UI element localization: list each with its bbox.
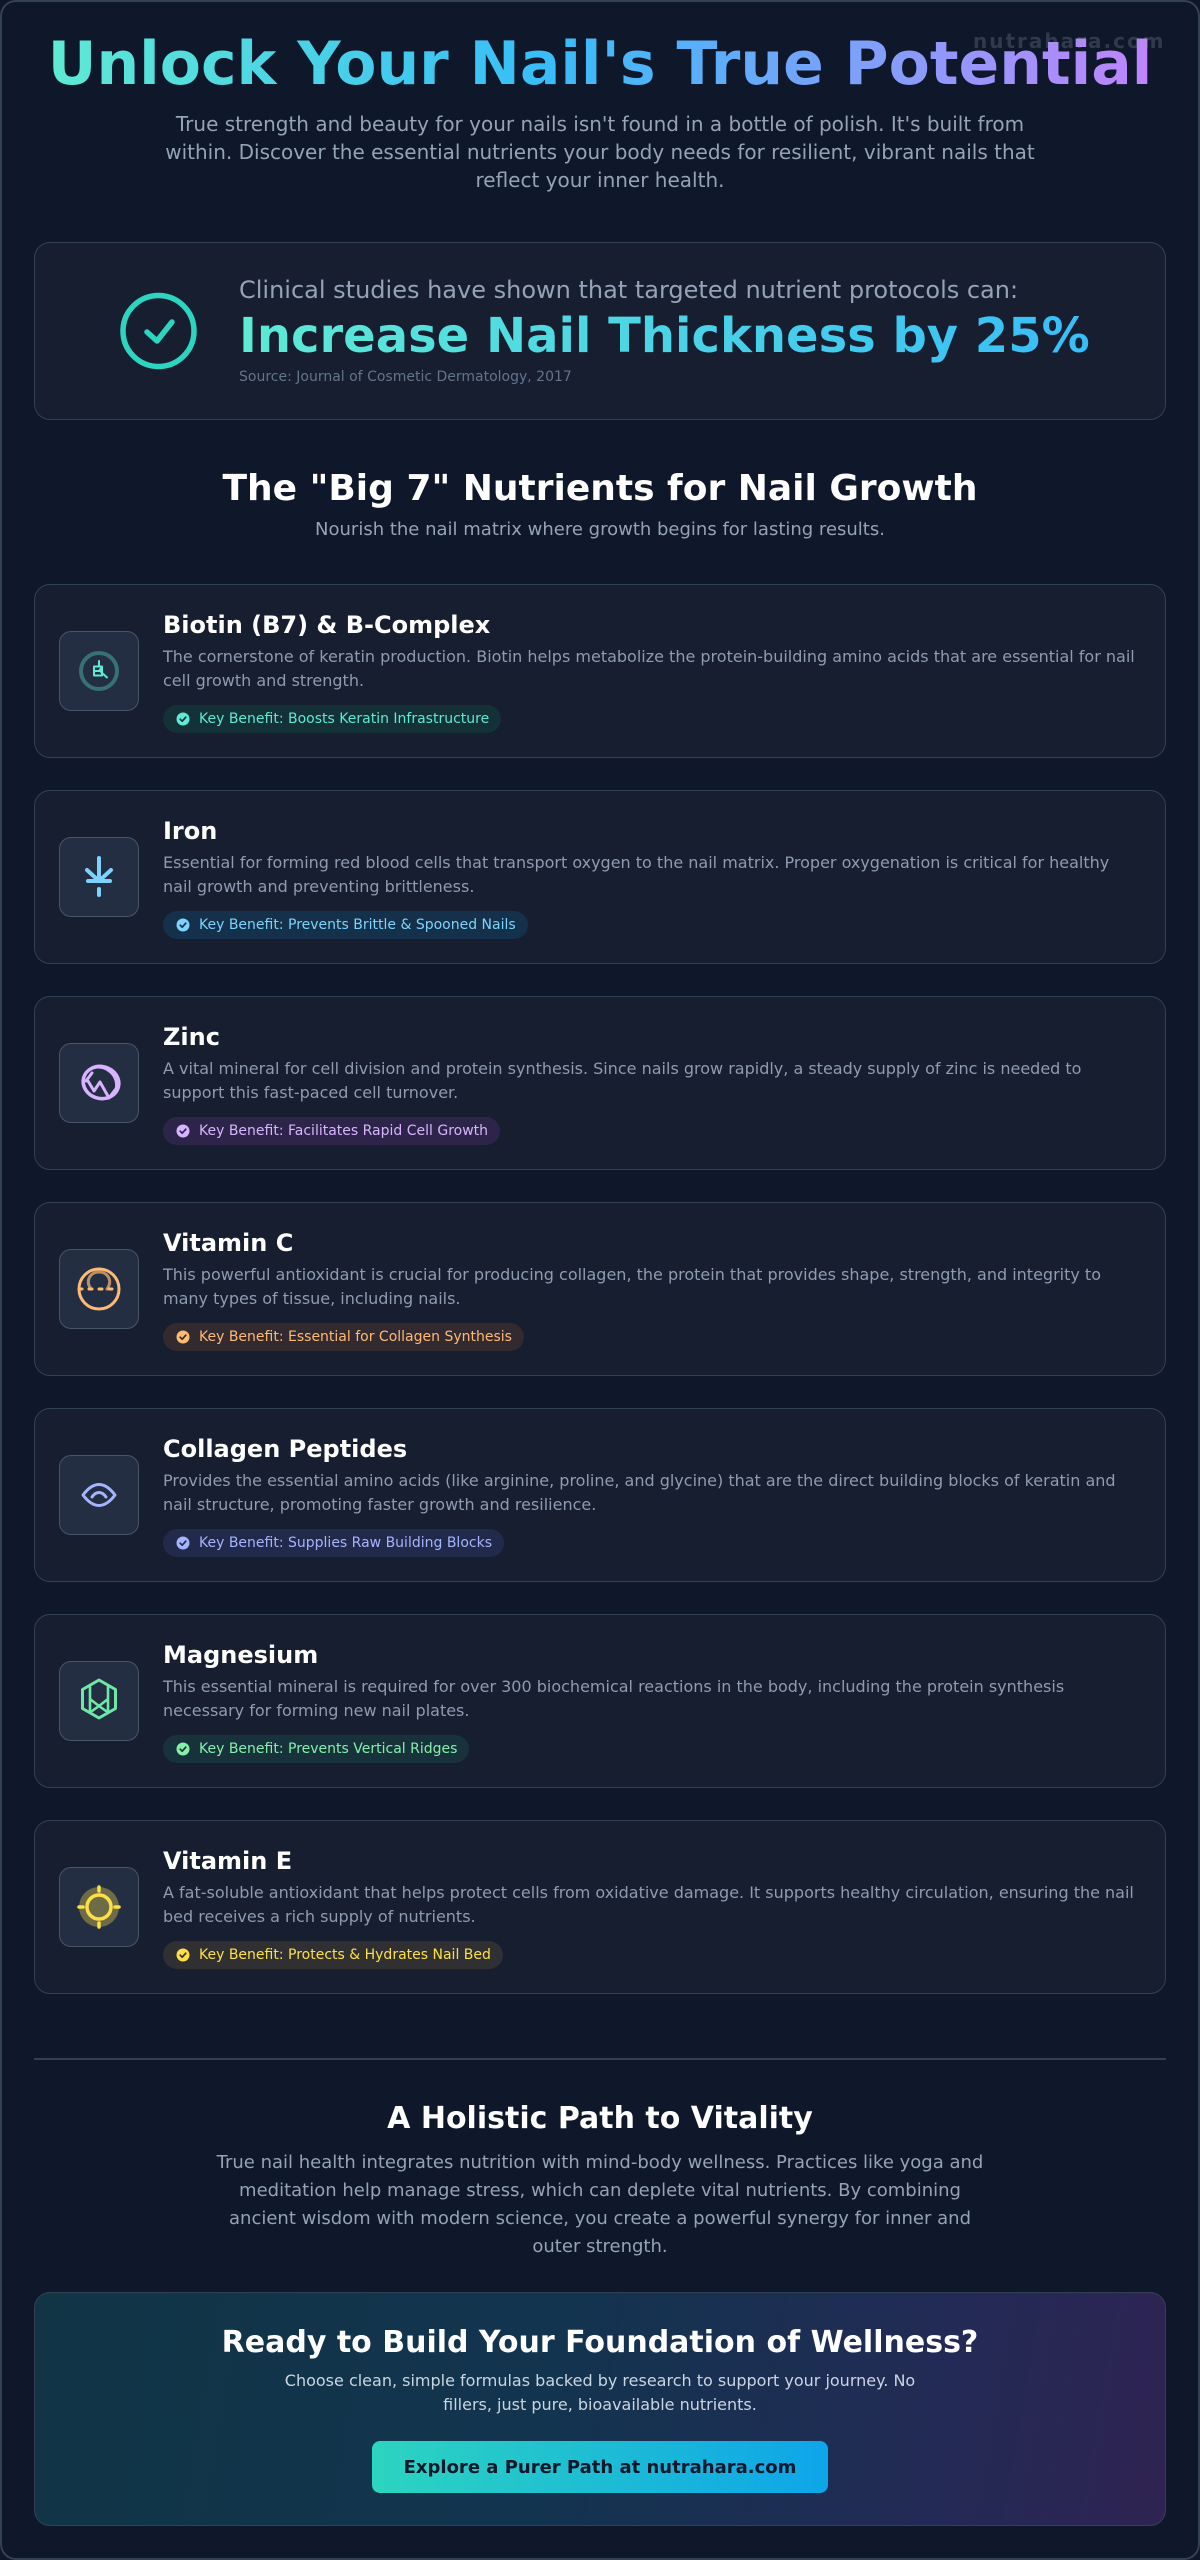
- intro paragraph: reflect your inner health.: [476, 168, 724, 192]
- nutrient description: [162, 647, 1135, 690]
- watermark: nutrahara.com: [973, 29, 1166, 53]
- holistic paragraph: outer strength.: [532, 2236, 668, 2257]
- key benefit pill: Key Benefit: Facilitates Rapid Cell Growth: [199, 1123, 488, 1139]
- nutrient description: [163, 1883, 1134, 1926]
- key benefit pill: [163, 1735, 469, 1763]
- panel: biotin: [34, 584, 1166, 758]
- stat source: Source: Journal of Cosmetic Dermatology, 2017: [239, 369, 572, 385]
- nutrient description: [162, 1265, 1101, 1308]
- holistic paragraph: [216, 2152, 983, 2257]
- nutrient description: [163, 853, 1109, 896]
- nutrient description: cell growth and strength.: [163, 671, 364, 690]
- nutrient description: [163, 1471, 1116, 1514]
- holistic paragraph: meditation help manage stress, which can deplete vital nutrients. By combining: [239, 2180, 961, 2201]
- panel: collagen peptides: [34, 1408, 1166, 1582]
- nutrient name: Vitamin E: [163, 1847, 292, 1875]
- stat lead-in: Clinical studies have shown that targeted nutrient protocols can:: [239, 276, 1018, 304]
- key benefit pill: [163, 705, 501, 733]
- panel: vitamin c: [34, 1202, 1166, 1376]
- cta button: Explore a Purer Path at nutrahara.com: [404, 2457, 796, 2478]
- key benefit pill: Key Benefit: Prevents Brittle & Spooned Nails: [199, 917, 516, 933]
- nutrient name: Biotin (B7) & B-Complex: [163, 611, 490, 639]
- nutrient description: This powerful antioxidant is crucial for producing collagen, the protein that provides shape, strength, and integrity to: [163, 1265, 1101, 1284]
- nutrient name: Zinc: [163, 1023, 220, 1051]
- intro paragraph: True strength and beauty for your nails isn't found in a bottle of polish. It's built from: [176, 112, 1024, 136]
- panel: magnesium: [34, 1614, 1166, 1788]
- icon: vitamin c: [59, 1249, 139, 1329]
- intro paragraph: within. Discover the essential nutrients your body needs for resilient, vibrant nails that: [165, 140, 1035, 164]
- key benefit pill: Key Benefit: Prevents Vertical Ridges: [199, 1741, 457, 1757]
- key benefit pill: [163, 1941, 503, 1969]
- panel: call to action: [34, 2292, 1166, 2526]
- panel: vitamin e: [34, 1820, 1166, 1994]
- key benefit pill: [163, 1323, 524, 1351]
- icon: collagen peptides: [59, 1455, 139, 1535]
- nutrient description: many types of tissue, including nails.: [163, 1289, 461, 1308]
- stat headline: Increase Nail Thickness by 25%: [239, 308, 1090, 364]
- nutrient description: This essential mineral is required for over 300 biochemical reactions in the body, including the protein synthesis: [163, 1677, 1064, 1696]
- key benefit pill: Key Benefit: Supplies Raw Building Blocks: [199, 1535, 492, 1551]
- key benefit pill: [163, 1529, 504, 1557]
- intro paragraph: [165, 112, 1035, 192]
- subheading: big 7: Nourish the nail matrix where growth begins for lasting results.: [315, 519, 885, 540]
- nutrient description: [163, 1059, 1081, 1102]
- nutrient name: Vitamin C: [163, 1229, 293, 1257]
- icon: vitamin e: [59, 1867, 139, 1947]
- heading: big 7: The "Big 7" Nutrients for Nail Growth: [222, 468, 978, 509]
- nutrient description: [162, 1677, 1064, 1720]
- nutrient description: nail structure, promoting faster growth and resilience.: [163, 1495, 596, 1514]
- panel: zinc: [34, 996, 1166, 1170]
- nutrient description: bed receives a rich supply of nutrients.: [163, 1907, 476, 1926]
- cta text: Choose clean, simple formulas backed by research to support your journey. No: [285, 2371, 915, 2390]
- nutrient description: nail growth and preventing brittleness.: [163, 877, 474, 896]
- key benefit pill: [163, 911, 528, 939]
- nutrient description: The cornerstone of keratin production. Biotin helps metabolize the protein-building amino acids that are essential for nail: [163, 647, 1135, 666]
- nutrient description: support this fast-paced cell turnover.: [163, 1083, 458, 1102]
- key benefit pill: [163, 1117, 500, 1145]
- key benefit pill: Key Benefit: Boosts Keratin Infrastructure: [199, 711, 489, 727]
- icon: iron: [59, 837, 139, 917]
- nutrient name: Iron: [163, 817, 217, 845]
- panel: iron: [34, 790, 1166, 964]
- cta button: [372, 2441, 828, 2493]
- icon: zinc: [59, 1043, 139, 1123]
- icon: check circle: [120, 292, 197, 370]
- icon: magnesium: [59, 1661, 139, 1741]
- nutrient name: Magnesium: [163, 1641, 318, 1669]
- holistic paragraph: ancient wisdom with modern science, you create a powerful synergy for inner and: [229, 2208, 971, 2229]
- icon: biotin: [59, 631, 139, 711]
- cta text: fillers, just pure, bioavailable nutrients.: [443, 2395, 757, 2414]
- key benefit pill: Key Benefit: Essential for Collagen Synthesis: [199, 1329, 512, 1345]
- nutrient description: Provides the essential amino acids (like arginine, proline, and glycine) that are the direct building blocks of keratin and: [163, 1471, 1116, 1490]
- nutrient description: A vital mineral for cell division and protein synthesis. Since nails grow rapidly, a steady supply of zinc is needed to: [163, 1059, 1081, 1078]
- title: Unlock Your Nail's True Potential: [48, 29, 1152, 99]
- nutrient name: Collagen Peptides: [163, 1435, 407, 1463]
- cta heading: Ready to Build Your Foundation of Wellness?: [222, 2325, 978, 2360]
- nutrient description: A fat-soluble antioxidant that helps protect cells from oxidative damage. It supports healthy circulation, ensuring the nail: [163, 1883, 1134, 1902]
- key benefit pill: Key Benefit: Protects & Hydrates Nail Bed: [199, 1947, 491, 1963]
- divider: [34, 2058, 1166, 2060]
- heading: holistic path: A Holistic Path to Vitality: [387, 2101, 813, 2136]
- nutrient description: Essential for forming red blood cells that transport oxygen to the nail matrix. Proper oxygenation is critical for healthy: [163, 853, 1109, 872]
- panel: clinical stat: [34, 242, 1166, 420]
- cta text: [285, 2371, 915, 2414]
- holistic paragraph: True nail health integrates nutrition with mind-body wellness. Practices like yoga and: [217, 2152, 983, 2173]
- nutrient description: necessary for forming new nail plates.: [163, 1701, 469, 1720]
